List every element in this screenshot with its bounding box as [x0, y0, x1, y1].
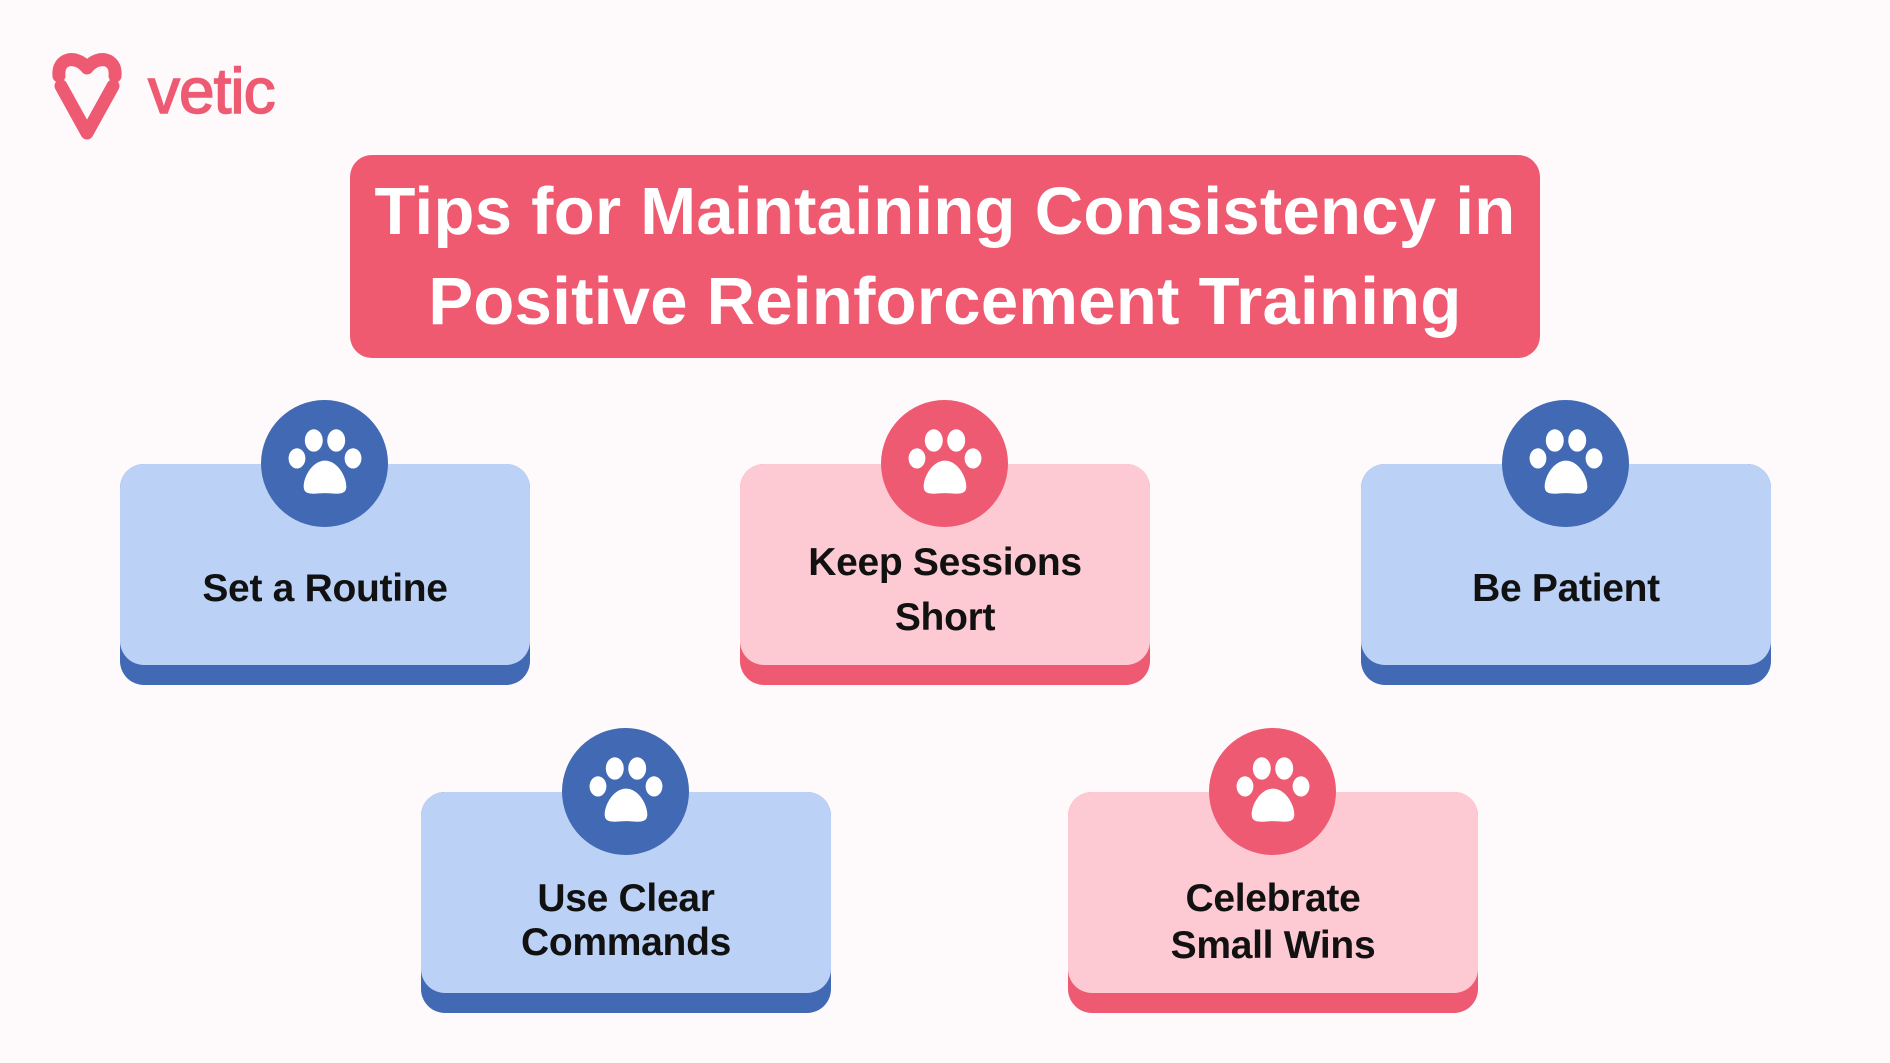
icon: paw 3	[1502, 400, 1629, 527]
icon: heart V	[52, 53, 122, 140]
title: Tips for Maintaining Consistency in	[375, 174, 1515, 249]
card: Celebrate Small Wins	[1068, 792, 1478, 1013]
icon: paw 5	[1209, 728, 1336, 855]
card: Be Patient	[1361, 464, 1771, 685]
card: Keep Sessions Short: Short	[895, 596, 995, 638]
card: Set a Routine: Set a Routine	[202, 567, 448, 610]
card: Set a Routine	[120, 464, 530, 685]
logo	[52, 53, 275, 140]
card: Keep Sessions Short: Keep Sessions	[808, 540, 1082, 584]
card: Use Clear Commands: Use Clear	[537, 876, 715, 920]
card: Keep Sessions Short	[740, 464, 1150, 685]
icon: paw 1	[261, 400, 388, 527]
card: Use Clear Commands	[421, 792, 831, 1013]
card: Be Patient: Be Patient	[1472, 567, 1660, 610]
card: Celebrate Small Wins: Small Wins	[1171, 924, 1375, 966]
card: Celebrate Small Wins: Celebrate	[1185, 876, 1361, 920]
card: Use Clear Commands: Commands	[521, 920, 731, 964]
title	[350, 155, 1540, 358]
brand name: vetic	[148, 55, 275, 127]
icon: paw 4	[562, 728, 689, 855]
title: Positive Reinforcement Training	[428, 264, 1462, 339]
icon: paw 2	[881, 400, 1008, 527]
